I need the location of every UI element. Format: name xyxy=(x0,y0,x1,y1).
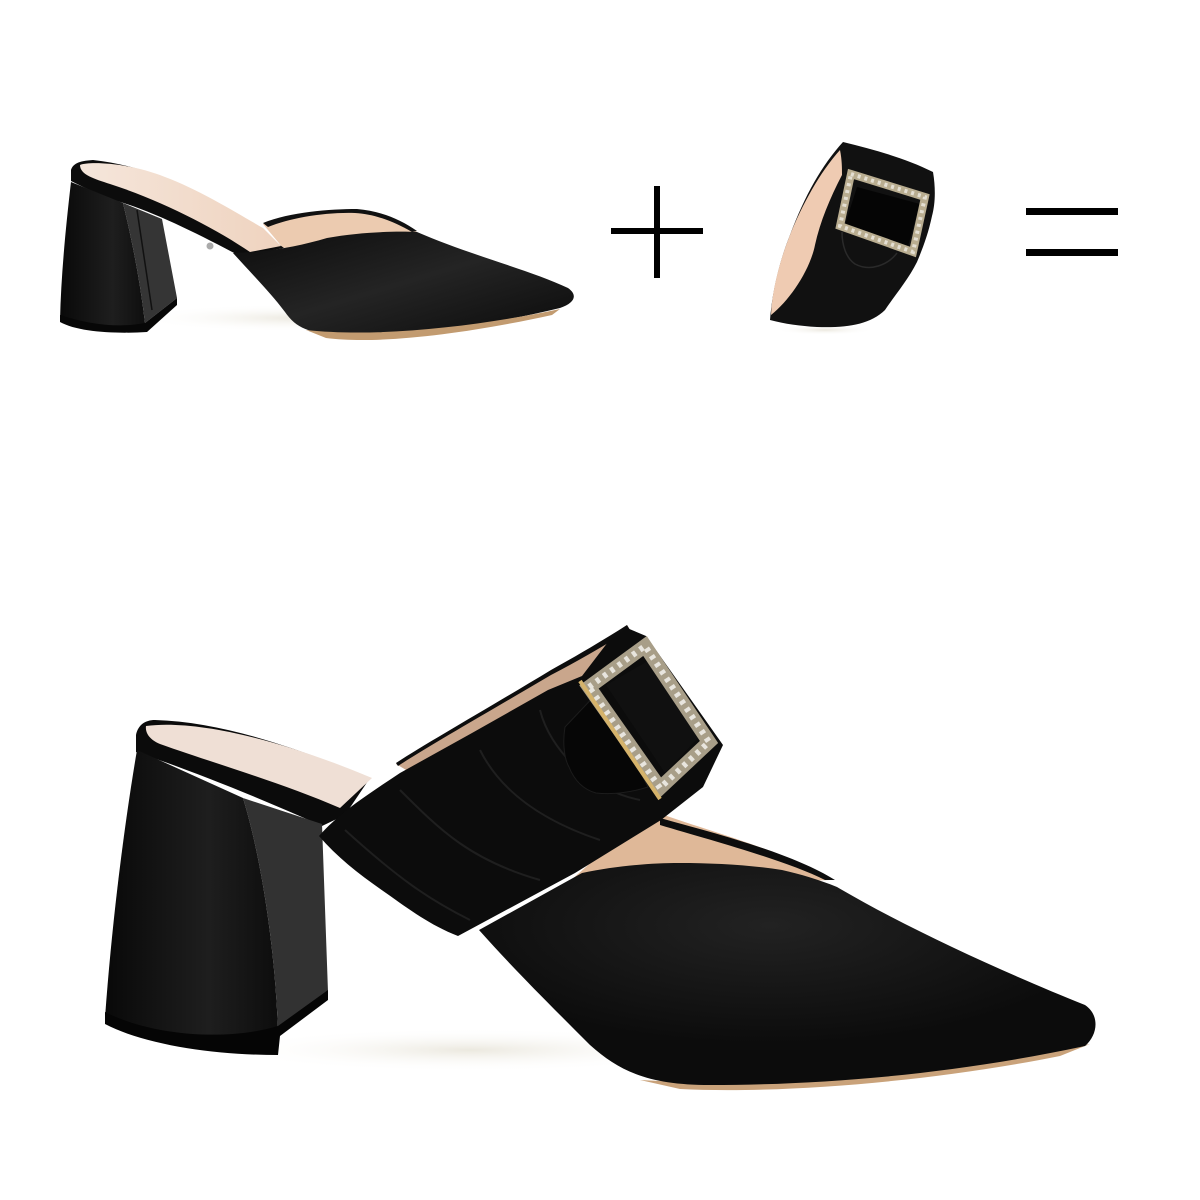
fur texture xyxy=(345,710,640,920)
strap lining behind xyxy=(396,625,650,790)
heel base xyxy=(60,298,177,333)
sole line xyxy=(640,1044,1090,1090)
rhinestone buckle xyxy=(589,646,709,788)
icon: equals sign xyxy=(1026,208,1118,256)
icon: plus sign xyxy=(611,186,703,278)
collar trim xyxy=(136,720,370,826)
fur strap through buckle xyxy=(606,657,699,773)
black footbed edge xyxy=(71,160,284,256)
large shoe with strap xyxy=(105,625,1096,1090)
small mule shoe xyxy=(60,160,574,340)
inner lining xyxy=(771,150,842,315)
footbed xyxy=(146,725,372,808)
lining xyxy=(263,210,417,248)
buckle tab xyxy=(564,690,648,794)
toe vamp xyxy=(233,232,574,334)
heel base xyxy=(105,990,328,1055)
wide strap xyxy=(319,628,723,936)
gold buckle edge xyxy=(580,681,660,799)
block heel xyxy=(60,182,148,331)
heel inner face xyxy=(243,798,328,1030)
tab xyxy=(842,232,897,267)
inner lining xyxy=(560,810,830,890)
footbed xyxy=(80,163,281,252)
toe vamp xyxy=(479,863,1096,1085)
block heel xyxy=(105,750,278,1054)
strap accessory xyxy=(770,142,935,335)
hardware bead xyxy=(206,242,214,250)
rhinestone buckle xyxy=(840,174,925,252)
fur strap through buckle xyxy=(845,187,920,246)
heel inner face xyxy=(123,203,177,323)
strap body xyxy=(770,142,935,327)
sole line xyxy=(306,309,560,340)
